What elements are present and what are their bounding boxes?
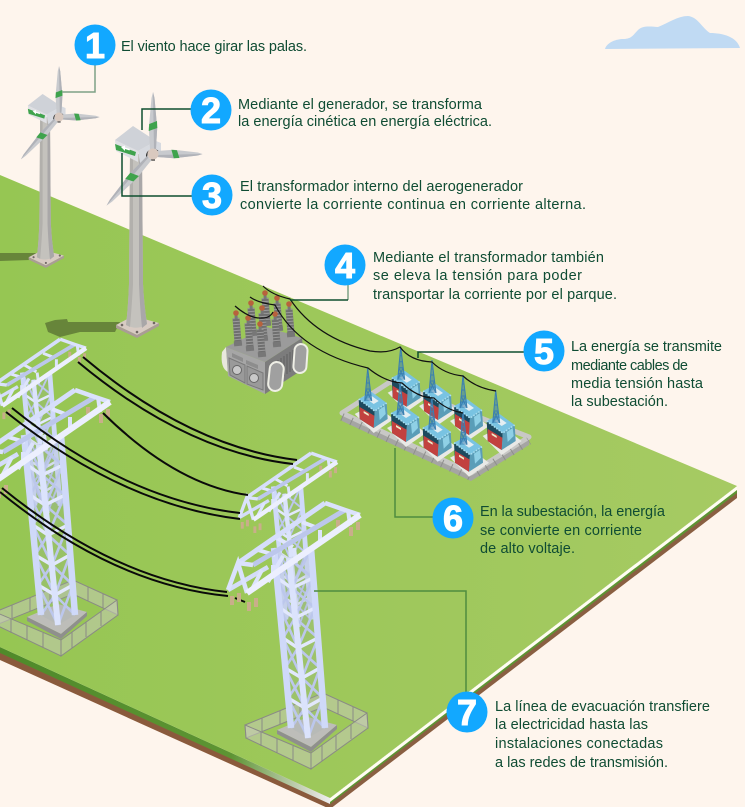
cloud [605, 16, 740, 49]
step 7: instalaciones conectadas [495, 736, 663, 752]
step 5 [524, 330, 722, 410]
pylon back right [239, 453, 337, 627]
step 6 [432, 498, 666, 557]
step 6: de alto voltaje. [480, 541, 575, 557]
step 3 [192, 174, 586, 216]
transformer [222, 290, 308, 394]
step 3: 3 [202, 175, 222, 216]
step 4: Mediante el transformador también [373, 250, 604, 266]
step 6: En la subestación, la energía [480, 504, 666, 520]
step 1 [74, 24, 307, 66]
pylon front left [0, 390, 118, 656]
step 4: 4 [335, 245, 355, 286]
medium voltage cables [235, 286, 496, 413]
step 7: La línea de evacuación transfiere [495, 699, 710, 715]
high voltage cables [0, 357, 297, 602]
step 6: 6 [443, 498, 463, 539]
step 4: transportar la corriente por el parque. [373, 287, 617, 303]
wind turbine front [103, 92, 203, 338]
step 5: La energía se transmite [571, 339, 722, 355]
step 2: la energía cinética en energía eléctrica. [238, 114, 492, 130]
step 4: se eleva la tensión para poder [373, 268, 582, 284]
step 5: 5 [534, 331, 554, 372]
wind turbine back [18, 66, 100, 268]
pylon back left [0, 339, 86, 513]
step 5: la subestación. [571, 394, 668, 410]
connector lines [62, 64, 525, 695]
step 5: media tensión hasta [571, 376, 704, 392]
step 7 [446, 692, 710, 771]
wind turbine shadows [0, 253, 120, 337]
step 3: convierte la corriente continua en corriente alterna. [240, 197, 586, 213]
ground platform [0, 175, 737, 807]
substation [342, 347, 529, 481]
step 3: El transformador interno del aerogenerador [240, 179, 523, 195]
step 2: Mediante el generador, se transforma [238, 97, 483, 113]
step 7: a las redes de transmisión. [495, 755, 668, 771]
step 1: 1 [85, 25, 105, 66]
step 4 [324, 244, 617, 303]
pylon front right [228, 503, 368, 769]
step 2 [190, 90, 492, 131]
step 1: El viento hace girar las palas. [121, 39, 307, 55]
step 6: se convierte en corriente [480, 523, 642, 539]
step 5: mediante cables de [571, 358, 688, 374]
step 7: 7 [457, 692, 477, 733]
step 7: la electricidad hasta las [495, 717, 648, 733]
step 2: 2 [201, 90, 221, 131]
